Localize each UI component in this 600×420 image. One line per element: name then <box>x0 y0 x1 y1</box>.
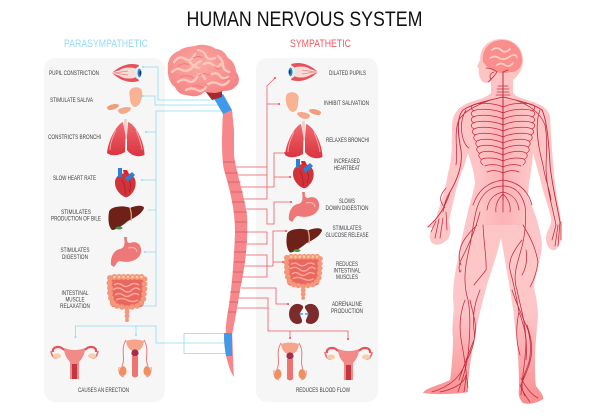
item: stimulates glucose release <box>286 225 368 252</box>
nerves <box>428 68 561 402</box>
item: slow heart rate: SLOW HEART RATE <box>53 175 96 182</box>
item: stimulate saliva: STIMULATE SALIVA <box>50 97 94 104</box>
item: adrenaline production: ADRENALINE <box>332 301 362 308</box>
sympathetic connectors <box>234 77 349 340</box>
item: reduces intestinal muscles: REDUCES <box>336 261 358 268</box>
item: intestinal muscle relaxation <box>60 274 148 322</box>
item: intestinal muscle relaxation: INTESTINAL <box>62 290 89 297</box>
panel: sympathetic <box>256 38 378 402</box>
central shading <box>478 100 528 225</box>
item: reduces intestinal muscles: INTESTINAL <box>334 268 361 274</box>
item: stimulates digestion <box>60 237 141 267</box>
item: reduces blood flow: REDUCES BLOOD FLOW <box>296 387 350 394</box>
item: inhibit salivation: INHIBIT SALIVATION <box>324 100 369 107</box>
title: HUMAN NERVOUS SYSTEM <box>186 8 422 31</box>
panel: parasympathetic <box>44 38 165 402</box>
heading: parasympathetic: PARASYMPATHETIC <box>64 38 148 50</box>
item: stimulate saliva <box>50 87 142 114</box>
item: stimulates production of bile <box>51 206 144 230</box>
item: causes an erection <box>51 340 151 394</box>
item: pupil constriction: PUPIL CONSTRICTION <box>49 70 99 77</box>
item: causes an erection: CAUSES AN ERECTION <box>78 387 129 394</box>
body silhouette <box>423 39 561 404</box>
parasympathetic connectors <box>74 66 226 354</box>
item: slows down digestion: DOWN DIGESTION <box>326 205 369 212</box>
item: adrenaline production <box>289 301 363 324</box>
spinal cord <box>213 94 248 377</box>
item: dilated pupils: DILATED PUPILS <box>329 70 366 77</box>
brain in head <box>483 40 522 73</box>
item: increased heartbeat: INCREASED <box>334 158 360 165</box>
item: inhibit salivation <box>286 92 369 119</box>
item: dilated pupils <box>288 63 366 81</box>
human body figure <box>423 39 561 404</box>
item: slows down digestion: SLOWS <box>339 198 355 205</box>
item: relaxes bronchi <box>285 121 369 158</box>
item: stimulates digestion: STIMULATES <box>60 247 90 254</box>
item: relaxes bronchi: RELAXES BRONCHI <box>326 137 369 144</box>
item: stimulates digestion: DIGESTION <box>62 254 88 261</box>
item: reduces intestinal muscles: MUSCLES <box>336 274 358 281</box>
item: slows down digestion <box>289 192 369 222</box>
item: intestinal muscle relaxation: RELAXATION <box>60 303 90 310</box>
item: constricts bronchi <box>48 119 144 156</box>
item: slow heart rate <box>53 168 136 197</box>
item: stimulates glucose release: GLUCOSE RELEASE <box>326 232 368 239</box>
item: adrenaline production: PRODUCTION <box>331 308 363 315</box>
item: increased heartbeat: HEARTBEAT <box>334 165 360 172</box>
item: stimulates production of bile: PRODUCTION OF BILE <box>51 216 101 222</box>
item: intestinal muscle relaxation: MUSCLE <box>66 296 84 304</box>
item: stimulates glucose release: STIMULATES <box>332 225 362 232</box>
item: stimulates production of bile: STIMULATES <box>61 209 91 216</box>
item: constricts bronchi: CONSTRICTS BRONCHI <box>48 134 101 141</box>
heading: sympathetic: SYMPATHETIC <box>290 38 351 50</box>
item: pupil constriction <box>49 64 142 82</box>
brain <box>168 45 239 100</box>
item: reduces blood flow <box>274 342 372 394</box>
item: reduces intestinal muscles <box>284 254 361 300</box>
item: increased heartbeat <box>293 158 360 188</box>
